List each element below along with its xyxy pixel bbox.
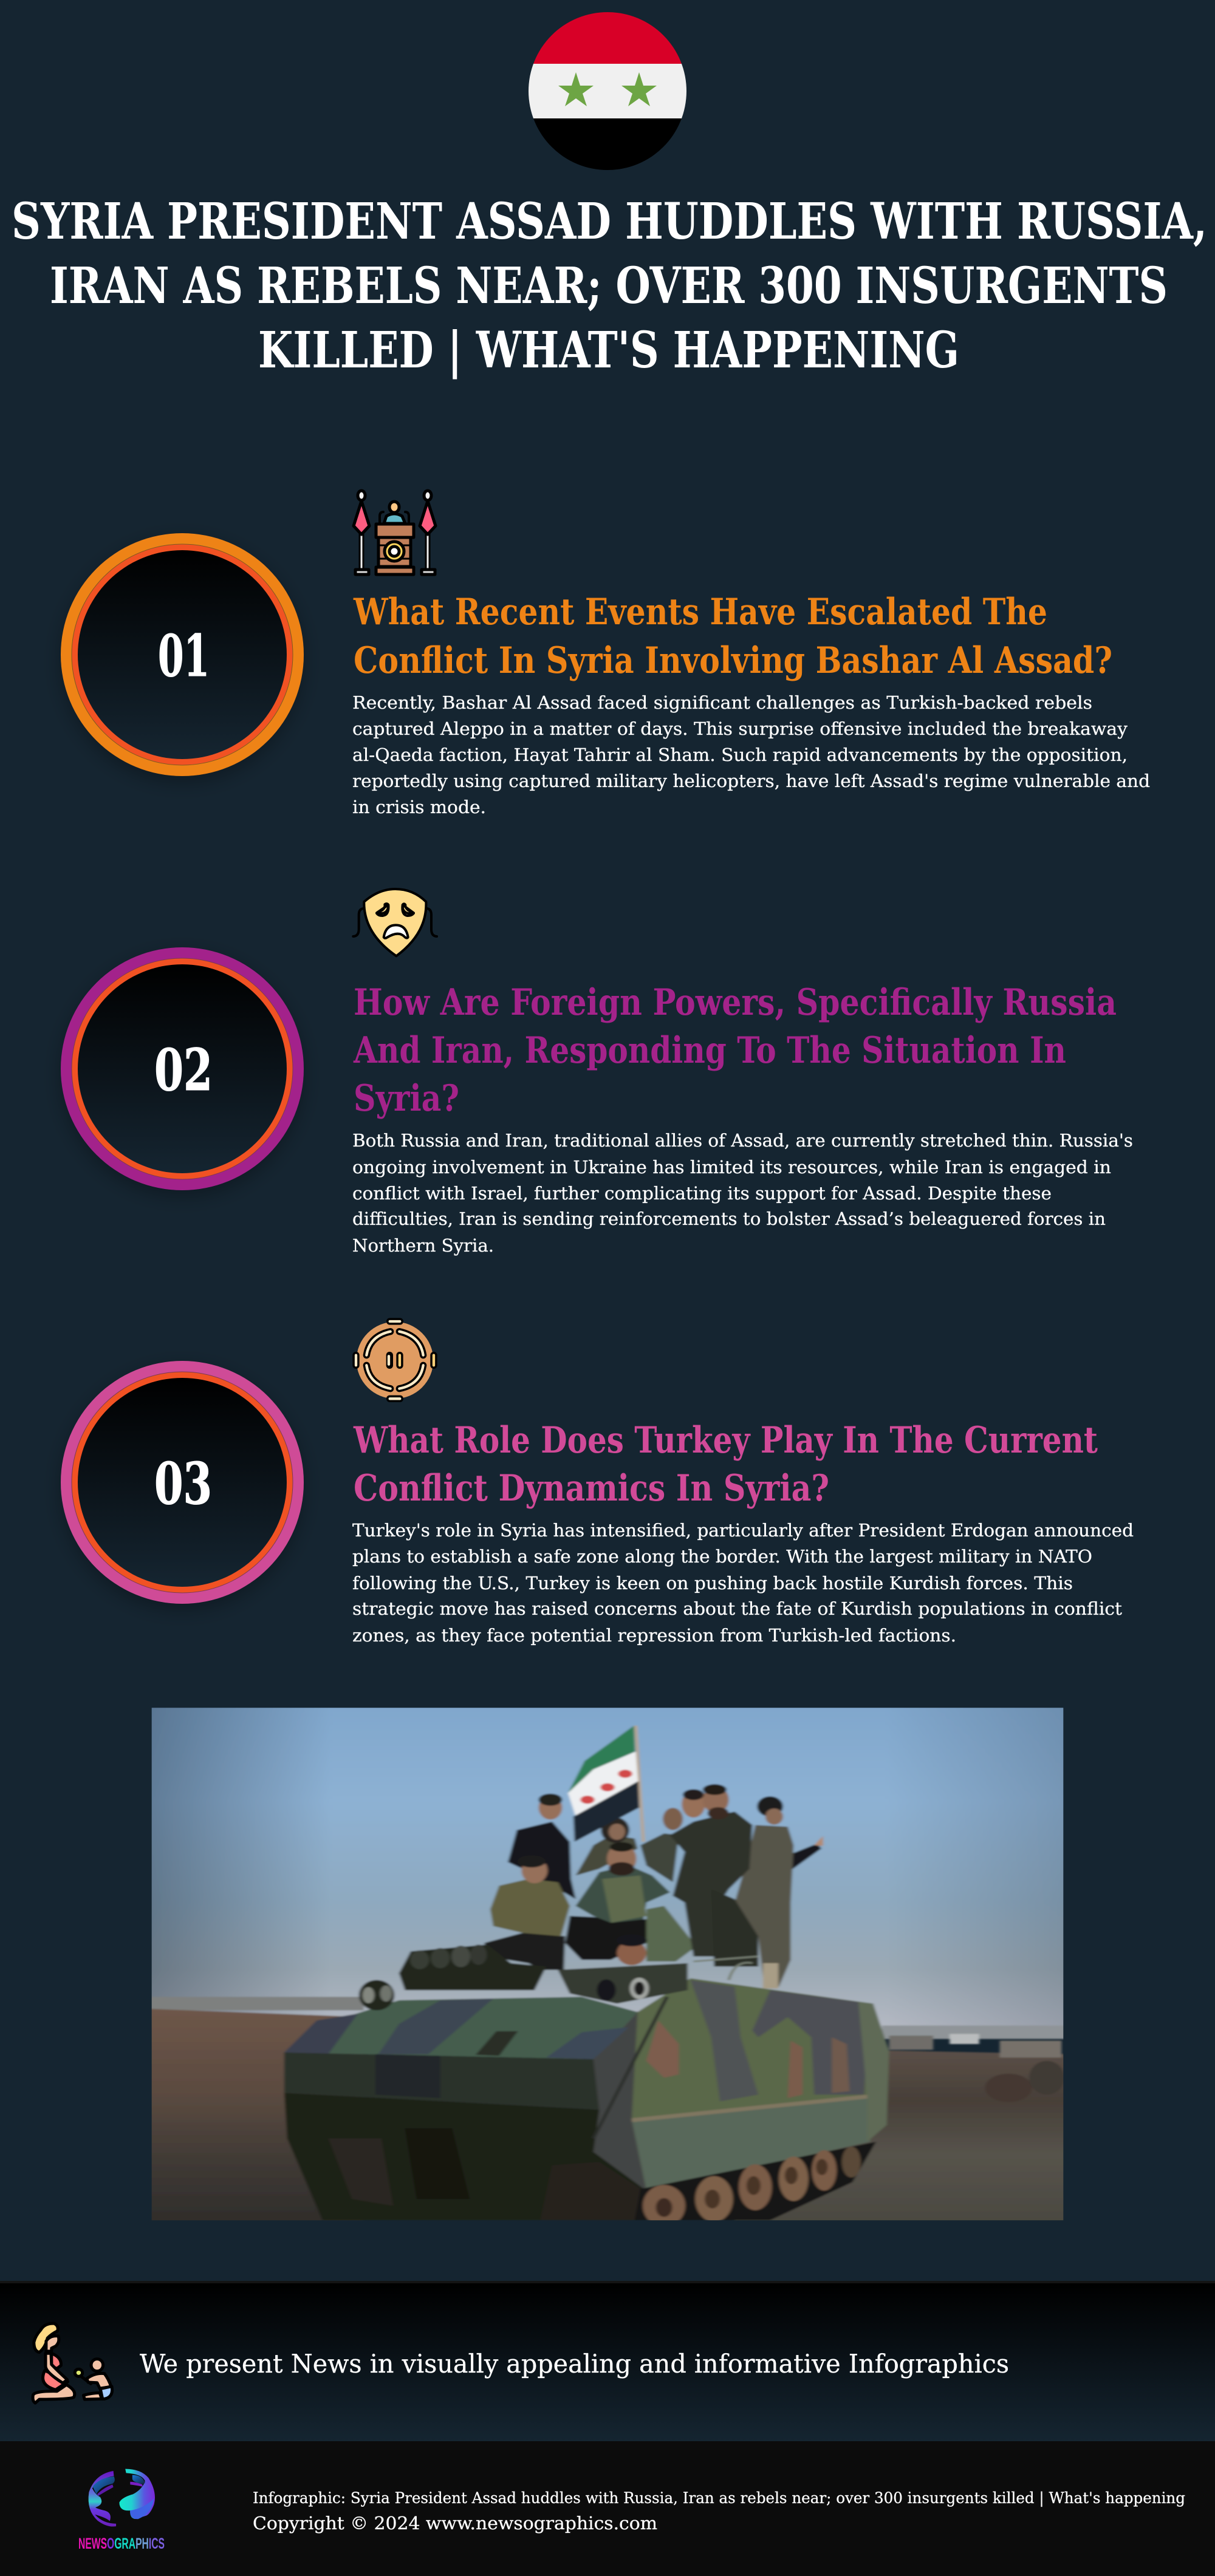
icon: mother and baby — [33, 2323, 112, 2403]
body text 02: Both Russia and Iran, traditional allies of Assad, are currently stretched thin. Russia's — [352, 1130, 1133, 1151]
panel: section 01 — [61, 491, 1150, 817]
icon: podium with flags — [354, 491, 436, 574]
logo wordmark: NEWSOGRAPHICS — [78, 2535, 165, 2552]
footer credit text — [253, 2489, 1185, 2533]
heading 01: Conflict In Syria Involving Bashar Al Assad? — [354, 639, 1112, 682]
heading 03 — [353, 1419, 1098, 1510]
icon: round target dial — [356, 1321, 434, 1399]
logo: Newsographics globe — [89, 2469, 155, 2527]
body text 01 — [352, 692, 1150, 817]
heading 02: How Are Foreign Powers, Specifically Russia — [354, 981, 1117, 1024]
number badge 01 — [61, 533, 304, 776]
heading 03: Conflict Dynamics In Syria? — [354, 1467, 829, 1510]
panel: section 03 — [61, 1321, 1134, 1646]
panel: tagline band — [0, 2281, 1215, 2441]
body text 01: reportedly using captured military helicopters, have left Assad's regime vulnerable and — [352, 771, 1150, 791]
rebel flag — [636, 1726, 643, 1842]
body text 02: Northern Syria. — [352, 1235, 494, 1256]
heading 02 — [353, 981, 1117, 1120]
body text 03 — [352, 1520, 1134, 1646]
tagline text: We present News in visually appealing and informative Infographics — [140, 2349, 1009, 2379]
body text 01: captured Aleppo in a matter of days. This surprise offensive included the breakaway — [352, 718, 1128, 739]
icon: Syrian flag — [529, 12, 686, 170]
body text 01: Recently, Bashar Al Assad faced significant challenges as Turkish-backed rebels — [352, 692, 1092, 713]
heading 02: And Iran, Responding To The Situation In — [353, 1029, 1066, 1072]
title — [12, 193, 1207, 380]
footer credit text: Infographic: Syria President Assad huddles with Russia, Iran as rebels near; over 300 insurgents killed | What's happening — [253, 2489, 1185, 2507]
vehicle — [694, 1957, 758, 1980]
body text 02: ongoing involvement in Ukraine has limited its resources, while Iran is engaged in — [352, 1157, 1111, 1177]
soldiers — [646, 1906, 696, 1961]
title: KILLED | WHAT'S HAPPENING — [258, 321, 959, 380]
heading 02: Syria? — [354, 1077, 459, 1120]
heading 01: What Recent Events Have Escalated The — [353, 591, 1047, 633]
footer credit text: Copyright © 2024 www.newsographics.com — [253, 2513, 657, 2533]
heading 01 — [353, 591, 1112, 682]
body text 03: Turkey's role in Syria has intensified, particularly after President Erdogan announced — [352, 1520, 1134, 1541]
road wheels and track — [635, 2142, 876, 2220]
number badge 02: 02 — [154, 1037, 213, 1104]
body text 01: al-Qaeda faction, Hayat Tahrir al Sham. Such rapid advancements by the opposition, — [352, 745, 1128, 765]
photo: soldiers with opposition flag on armoured vehicle — [146, 1700, 1070, 2227]
body text 01: in crisis mode. — [352, 797, 486, 817]
body text 02 — [352, 1130, 1133, 1256]
number badge 03 — [61, 1361, 304, 1604]
number badge 03: 03 — [154, 1450, 212, 1518]
vehicle top fittings — [399, 1944, 546, 1990]
panel: section 02 — [61, 889, 1133, 1256]
body text 03: zones, as they face potential repression from Turkish-led factions. — [352, 1625, 956, 1646]
body text 03: plans to establish a safe zone along the border. With the largest military in NATO — [352, 1546, 1092, 1567]
body text 02: conflict with Israel, further complicating its support for Assad. Despite these — [352, 1183, 1052, 1204]
body text 02: difficulties, Iran is sending reinforcements to bolster Assad’s beleaguered forces in — [352, 1208, 1106, 1229]
number badge 02 — [61, 947, 304, 1190]
panel: footer — [0, 2441, 1215, 2576]
icon: sad theatre mask — [353, 889, 437, 956]
body text 03: following the U.S., Turkey is keen on pushing back hostile Kurdish forces. This — [352, 1573, 1073, 1593]
body text 03: strategic move has raised concerns about the fate of Kurdish populations in conflict — [352, 1598, 1123, 1619]
number badge 01: 01 — [158, 622, 210, 690]
heading 03: What Role Does Turkey Play In The Current — [353, 1419, 1098, 1462]
